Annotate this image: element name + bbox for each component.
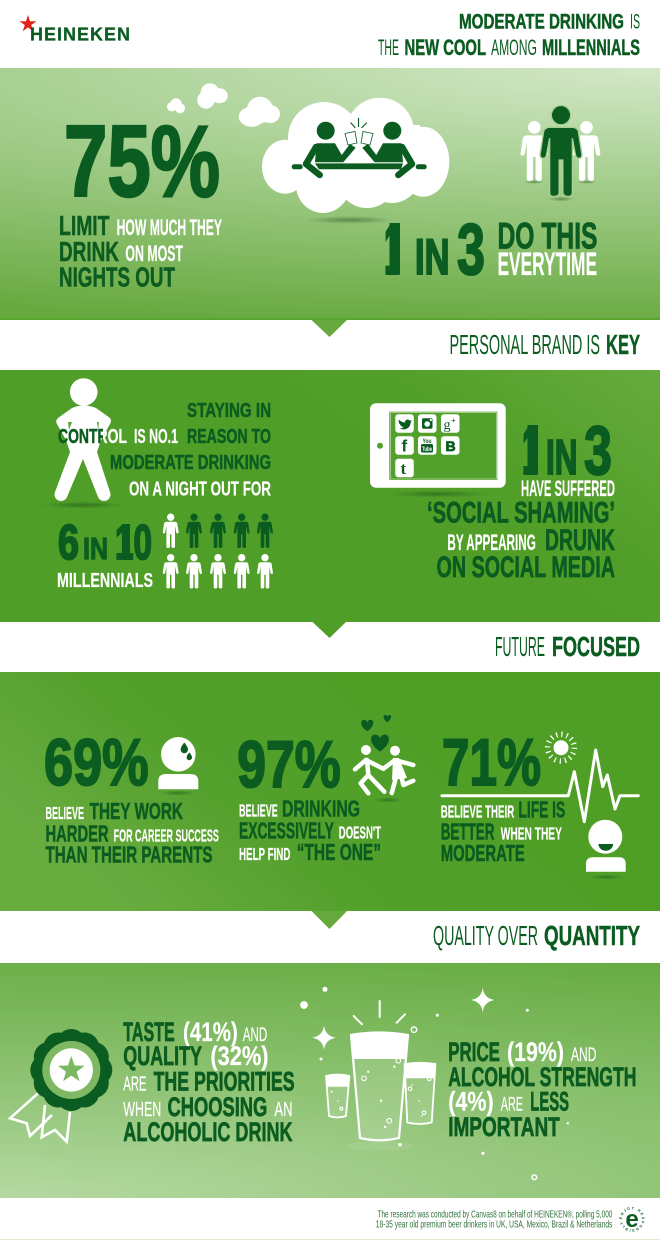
text: social shaming xyxy=(427,476,615,584)
text: staying in control: CONTROL xyxy=(58,426,127,448)
icon: medium glass xyxy=(404,1063,436,1124)
text: staying in control: STAYING IN xyxy=(187,400,271,422)
header xyxy=(19,10,640,60)
icon: tablet with social apps: B xyxy=(446,438,456,454)
icon: tablet with social apps: f xyxy=(402,436,408,456)
icon: tablet with social apps: g xyxy=(444,418,450,433)
text: price and alcohol strength xyxy=(448,1037,636,1142)
panel: quality over quantity xyxy=(0,963,660,1198)
panel: limit drinking xyxy=(0,68,660,320)
icon: cloud with friends at a table xyxy=(262,98,449,224)
arrow: to personal brand xyxy=(312,320,347,337)
panel: personal brand xyxy=(0,370,660,622)
text: taste and quality: CHOOSING xyxy=(168,1092,267,1122)
text: believe their life is better: LIFE IS xyxy=(518,796,565,822)
stat: 1 in 3 social shaming: IN xyxy=(546,431,578,485)
text: believe drinking excessively: BELIEVE xyxy=(239,801,278,821)
icon: tablet with social apps xyxy=(370,403,506,498)
icon: award ribbon xyxy=(10,1029,112,1142)
icon: smiling person xyxy=(586,820,626,880)
stat: 6 in 10 millennials: 6 xyxy=(58,516,79,570)
text: social shaming: DRUNK xyxy=(545,524,615,557)
text: believe drinking excessively xyxy=(239,796,381,865)
title: NEW COOL xyxy=(404,35,486,60)
footer xyxy=(0,1206,660,1240)
text: believe their life is better: MODERATE xyxy=(441,840,525,866)
icon: large glass xyxy=(350,1032,409,1140)
icon: 6 in 10 pictogram xyxy=(163,514,273,588)
stat: 69%: 69% xyxy=(44,725,149,799)
icon: beer glasses with sparkles xyxy=(300,987,569,1180)
text: believe drinking excessively: DRINKING xyxy=(282,796,360,822)
icon: tablet with social apps: + xyxy=(451,416,456,425)
stat: 1 in 3 social shaming: 1 xyxy=(522,412,538,489)
stat: 1 in 3 social shaming: 3 xyxy=(584,412,612,489)
text: taste and quality xyxy=(123,1017,295,1147)
text: believe their life is better: BETTER xyxy=(441,818,494,844)
icon: one in three people xyxy=(520,106,600,202)
stat: 1 in 3 do this everytime: DO THIS xyxy=(498,215,598,256)
text: limit how much they drink: DRINK xyxy=(59,236,119,267)
stat: 6 in 10 millennials xyxy=(57,516,153,592)
icon: enjoy responsibly: e xyxy=(625,1206,639,1233)
text: believe they work harder: THAN THEIR PARENTS xyxy=(46,841,212,867)
stat: 6 in 10 millennials: MILLENNIALS xyxy=(57,570,153,592)
text: price and alcohol strength: (4%) xyxy=(448,1087,494,1117)
text: believe they work harder: THEY WORK xyxy=(90,798,183,824)
text: research note xyxy=(376,1208,612,1230)
stat: 1 in 3 social shaming xyxy=(522,412,612,489)
text: believe drinking excessively: DOESN'T xyxy=(339,822,381,842)
text: staying in control: ON A NIGHT OUT FOR xyxy=(129,479,271,501)
text: price and alcohol strength: IMPORTANT xyxy=(448,1112,560,1142)
text: believe they work harder: HARDER xyxy=(46,821,109,847)
text: taste and quality: WHEN xyxy=(123,1099,161,1121)
text: staying in control: IS NO.1 xyxy=(134,426,178,448)
panel: future focused xyxy=(0,672,660,911)
text: taste and quality: AND xyxy=(243,1025,267,1046)
icon: small glass xyxy=(325,1074,350,1118)
text: believe drinking excessively: EXCESSIVELY xyxy=(239,817,334,843)
text: believe drinking excessively: HELP FIND xyxy=(239,844,290,864)
stat: 71%: 71% xyxy=(442,725,541,799)
text: price and alcohol strength: LESS xyxy=(530,1087,569,1117)
heading: future focused: FUTURE xyxy=(495,631,545,662)
text: price and alcohol strength: AND xyxy=(571,1045,596,1066)
stat: 1 in 3 do this everytime: IN xyxy=(415,229,450,285)
icon: couple and hearts xyxy=(355,715,413,802)
icon: tablet with social apps: You xyxy=(422,439,432,445)
arrow: to quality over quantity xyxy=(312,911,347,929)
text: believe they work harder: BELIEVE xyxy=(46,803,84,823)
icon: person hands on hips xyxy=(41,378,125,508)
icon: heartbeat line xyxy=(442,750,638,822)
text: limit how much they drink xyxy=(59,210,222,293)
icon: tablet with social apps: Tube xyxy=(422,446,432,453)
text: believe their life is better: BELIEVE THEIR xyxy=(441,801,515,821)
text: taste and quality: (32%) xyxy=(210,1041,268,1071)
text: price and alcohol strength: PRICE xyxy=(448,1037,500,1067)
text: taste and quality: AN xyxy=(274,1099,292,1121)
text: believe drinking excessively: “THE ONE” xyxy=(297,839,381,865)
stat: 75%: 75% xyxy=(64,106,220,218)
text: staying in control: MODERATE DRINKING xyxy=(110,452,271,474)
text: limit how much they drink: LIMIT xyxy=(59,210,110,241)
text: staying in control xyxy=(58,400,271,501)
text: limit how much they drink: NIGHTS OUT xyxy=(59,262,175,293)
stat: 1 in 3 do this everytime: 3 xyxy=(457,210,485,290)
text: believe their life is better: WHEN THEY xyxy=(501,823,562,843)
text: taste and quality: (41%) xyxy=(183,1017,238,1047)
text: believe they work harder xyxy=(46,798,219,867)
heading: quality over quantity: QUALITY OVER xyxy=(433,920,538,951)
icon: sun xyxy=(548,734,574,761)
title: AMONG xyxy=(491,35,537,60)
text: price and alcohol strength: ARE xyxy=(501,1095,523,1116)
logo: Heineken xyxy=(19,15,130,45)
text: believe they work harder: FOR CAREER SUCCESS xyxy=(114,826,219,846)
text: taste and quality: QUALITY xyxy=(123,1041,202,1071)
title: IS xyxy=(630,10,640,33)
text: social shaming: BY APPEARING xyxy=(447,530,536,555)
title xyxy=(378,10,640,60)
stat: 1 in 3 do this everytime xyxy=(384,210,598,290)
text: taste and quality: THE PRIORITIES xyxy=(154,1067,295,1097)
text: limit how much they drink: ON MOST xyxy=(125,241,183,266)
text: limit how much they drink: HOW MUCH THEY xyxy=(117,215,222,240)
text: taste and quality: ARE xyxy=(123,1074,146,1096)
text: staying in control: CONTROL xyxy=(58,426,127,448)
stat: 6 in 10 millennials: IN xyxy=(83,532,108,566)
stat: 97%: 97% xyxy=(237,727,341,801)
logo: Heineken: HEINEKEN xyxy=(30,25,130,45)
text: believe their life is better xyxy=(441,796,565,866)
stat: 6 in 10 millennials: 10 xyxy=(115,516,152,570)
text: taste and quality: ALCOHOLIC DRINK xyxy=(123,1117,293,1147)
icon: crying person xyxy=(158,737,198,796)
text: taste and quality: TASTE xyxy=(123,1017,175,1047)
text: price and alcohol strength: (19%) xyxy=(507,1037,564,1067)
stat: 1 in 3 do this everytime: 1 xyxy=(384,210,400,290)
title: THE xyxy=(378,35,399,60)
icon: enjoy responsibly: ENJOY RESPONSIBLY xyxy=(619,1206,644,1232)
arrow: to future focused xyxy=(312,621,347,638)
icon: small thought clouds xyxy=(167,83,280,127)
text: staying in control: REASON TO xyxy=(187,426,271,448)
icon: tablet with social apps: t xyxy=(400,459,406,478)
